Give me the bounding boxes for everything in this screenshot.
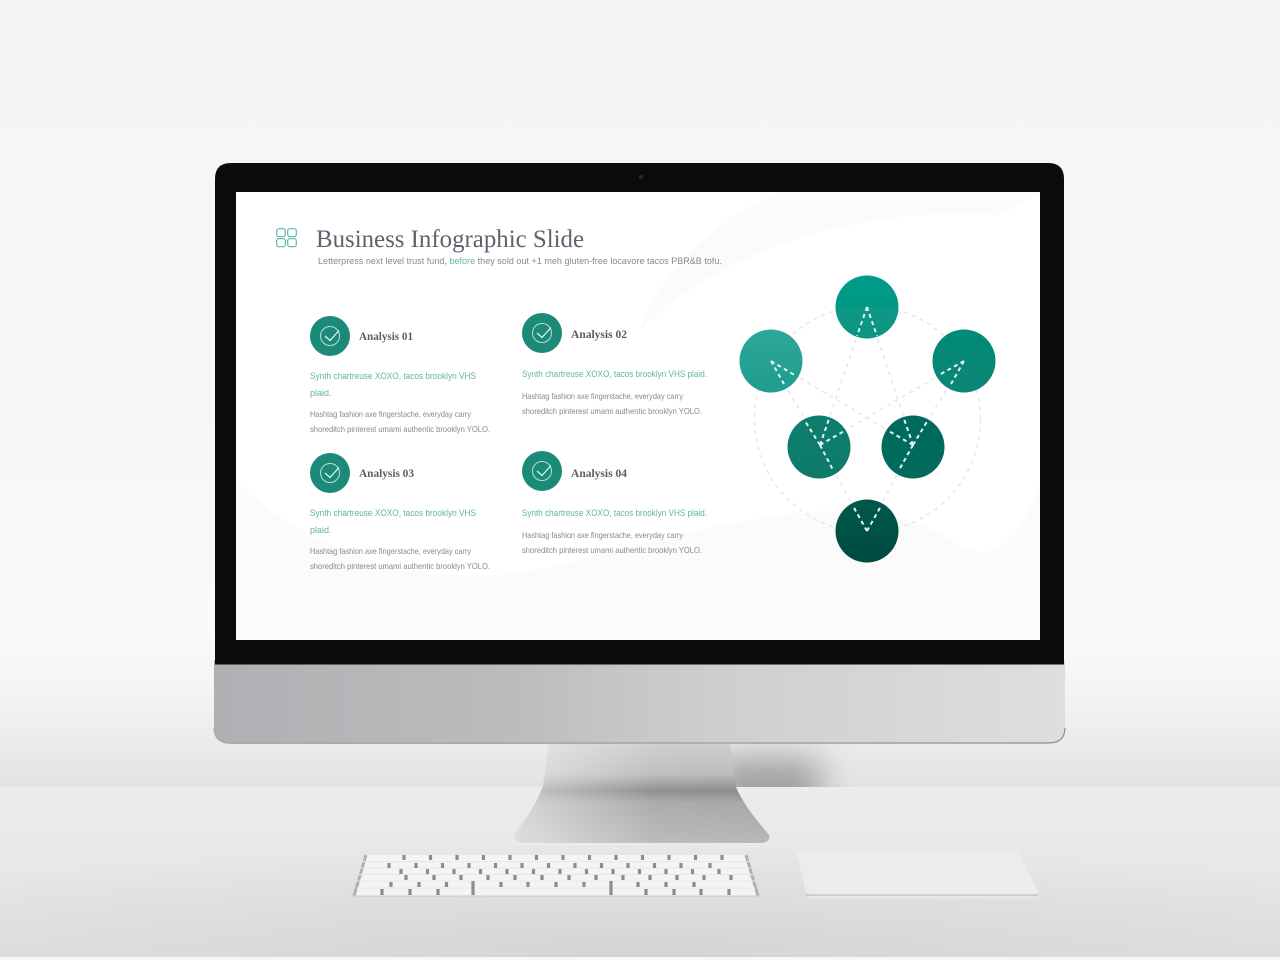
heading: analysis 03: Analysis 03 (359, 468, 414, 480)
node 5 (882, 416, 944, 478)
panel: analysis 02 (522, 313, 707, 416)
icon: check badge 02 (522, 313, 562, 353)
highlight text 01: Synth chartreuse XOXO, tacos brooklyn VHS (310, 371, 476, 381)
title: Business Infographic Slide (316, 226, 584, 253)
trackpad (797, 852, 1038, 899)
highlight text 04: Synth chartreuse XOXO, tacos brooklyn VHS plaid. (522, 508, 707, 518)
highlight text 02: Synth chartreuse XOXO, tacos brooklyn VHS plaid. (522, 369, 707, 379)
dashed ring (754, 306, 980, 532)
subtitle: Letterpress next level trust fund, before they sold out +1 meh gluten-free locavore tacos PBR&B tofu. (318, 256, 722, 266)
monitor (214, 163, 1065, 744)
slide background swoosh (236, 192, 1040, 640)
node 2 (740, 330, 802, 392)
key gaps (382, 855, 731, 895)
node 4 (788, 416, 850, 478)
highlight text 03: plaid. (310, 525, 332, 535)
body text 03: shoreditch pinterest umami authentic brooklyn YOLO. (310, 562, 490, 571)
monitor shadow on wall (730, 744, 838, 787)
network diagram (740, 276, 996, 562)
monitor chin (214, 660, 1065, 744)
body text 02: shoreditch pinterest umami authentic brooklyn YOLO. (522, 407, 702, 416)
node 3 (932, 330, 996, 392)
white dashed spokes (771, 307, 964, 531)
heading: analysis 04: Analysis 04 (571, 468, 627, 480)
keyboard (353, 855, 759, 900)
highlight text 01: plaid. (310, 388, 332, 398)
body text 02: Hashtag fashion axe fingerstache, everyday carry (522, 392, 684, 401)
body text 04: shoreditch pinterest umami authentic brooklyn YOLO. (522, 546, 702, 555)
panel: analysis 04 (522, 451, 707, 555)
monitor bezel (215, 163, 1064, 664)
node 6 (836, 500, 898, 562)
background: desk (0, 787, 1280, 960)
slide panel (236, 192, 1040, 640)
body text 04: Hashtag fashion axe fingerstache, everyday carry (522, 531, 684, 540)
dashed connectors (771, 307, 964, 531)
icon: camera (639, 175, 643, 179)
highlight text 03: Synth chartreuse XOXO, tacos brooklyn VHS (310, 508, 476, 518)
node 1 (836, 276, 898, 338)
panel: analysis 03 (310, 453, 490, 571)
icon: check badge 01 (310, 316, 350, 356)
icon: check badge 03 (310, 453, 350, 493)
heading: analysis 02: Analysis 02 (571, 329, 627, 341)
monitor stand (513, 744, 771, 844)
body text 01: Hashtag fashion axe fingerstache, everyday carry (310, 410, 472, 419)
icon: title grid (277, 229, 296, 247)
heading: analysis 01: Analysis 01 (359, 331, 413, 343)
panel: analysis 01 (310, 316, 490, 434)
body text 03: Hashtag fashion axe fingerstache, everyday carry (310, 547, 472, 556)
body text 01: shoreditch pinterest umami authentic brooklyn YOLO. (310, 425, 490, 434)
icon: check badge 04 (522, 451, 562, 491)
